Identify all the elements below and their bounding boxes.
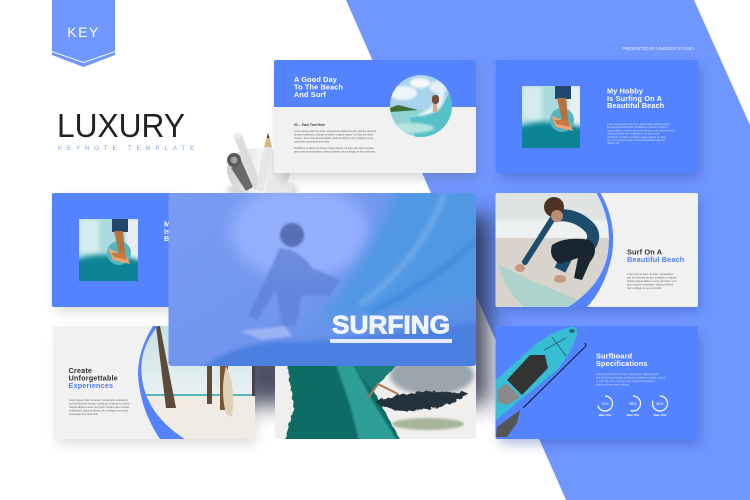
card heading: My Hobby <box>607 86 644 96</box>
surfboard illustration <box>495 327 577 421</box>
panel: my hobby card <box>496 60 700 178</box>
card body text: tempor incididunt ut labore et dolore magna aliqua. Ut enim ad minim <box>294 132 373 136</box>
icon: pencil holder <box>226 132 298 198</box>
gauge 2: 55% <box>629 402 637 406</box>
surfer feet photo <box>79 219 138 281</box>
card heading: Experiences <box>68 381 113 390</box>
panel: surfboard specifications card <box>495 326 700 444</box>
card body text: sed do eiusmod tempor incididunt ut labore et dolore <box>607 125 668 129</box>
card body text: ullamco laboris nisi ut aliquip <box>596 382 630 386</box>
card body text: laboris nisi <box>607 141 620 145</box>
card body text: dolore magna aliqua ut enim ad minim veni <box>627 279 677 283</box>
card body text: quis nostrud exercitation ullamco laboris <box>627 282 674 286</box>
surfer feet photo <box>522 86 580 148</box>
card heading: Beautiful Beach <box>627 255 684 264</box>
card body text: sed do eiusmod tempor incididunt ut labore et dolore <box>69 402 130 406</box>
panel: create unforgettable experiences card <box>53 326 256 444</box>
card body text: Incididunt ut labore et dolore magna aliqua ut enim <box>607 135 665 139</box>
card body text: sed do eiusmod tempor incididunt ut labore et dolore magna <box>596 376 666 380</box>
card body text: magna aliqua ut enim ad minim veniam quis nostrud <box>69 405 130 409</box>
card heading: Specifications <box>596 359 648 368</box>
title underline <box>330 339 452 343</box>
gauge 1: 70% <box>601 402 609 406</box>
gauge 3: 80% <box>656 402 664 406</box>
card body text <box>294 123 377 154</box>
main wave photo <box>203 193 476 366</box>
surfer photo <box>495 193 615 308</box>
panel: wave photo card <box>275 364 476 439</box>
panel: a good day card <box>274 60 478 178</box>
card body text: veniam, quis nostrud exercitation ullamco laboris nisi ut aliquip ex ea <box>294 136 373 140</box>
gauge 3 <box>652 396 668 417</box>
gauge 3: Main Title <box>654 413 667 417</box>
card body text: ullamco laboris nisi ut aliquip ex ea commodo <box>607 132 660 136</box>
presented by label: PRESENTED BY UNICODE STUDIO <box>622 46 694 52</box>
card body text: Lorem ipsum dolor sit amet, consectetur adipiscing elit, sed do eiusmod <box>294 129 377 133</box>
card body text: sed do eiusmod tempor incididunt ut labore <box>627 276 677 280</box>
gauge 1 <box>598 396 612 417</box>
card body text: exercitation ullamco laboris nisi ut aliquip commodo <box>69 408 129 412</box>
card body text: Lorem ipsum dolor sit amet, consectetur adipiscing <box>69 398 128 402</box>
card heading: Create <box>68 366 92 375</box>
paddle illustration <box>496 343 586 437</box>
card body text: consequat duis aute irure <box>69 412 99 416</box>
card body text: nisi ut aliquip ex ea commodo <box>627 286 662 290</box>
card heading fragment: B <box>164 234 169 243</box>
subtitle: KEYNOTE TEMPLATE <box>58 146 194 152</box>
card heading: To The Beach <box>294 82 343 92</box>
card heading: Unforgettable <box>68 374 118 382</box>
gauge 2: Main Title <box>627 413 640 417</box>
card body text: ut enim ad minim veniam, quis nostrud exercitation <box>596 379 655 383</box>
card body text: Incididunt ut labore et dolore magna aliqua. Ut enim ad minim veniam <box>294 146 374 150</box>
card heading: Is Surfing On A <box>607 94 663 103</box>
card body text: Lorem ipsum dolor sit amet, consectetur adipiscing elit <box>596 372 659 376</box>
panel: surf on a beach card <box>495 193 700 311</box>
main slide drop shadow <box>190 215 490 405</box>
SURFING title: SURFING <box>332 312 450 340</box>
card heading: Beautiful Beach <box>607 101 664 110</box>
card heading: Surfboard <box>596 352 632 360</box>
gauge 1: Main Title <box>599 413 612 417</box>
panel: my hobby card left copy <box>52 193 172 316</box>
card heading: A Good Day <box>294 75 338 84</box>
beach photo <box>138 326 256 441</box>
card body text: commodo consequat duis aute. <box>294 140 330 144</box>
KEY ribbon badge: KEY <box>67 24 100 40</box>
background blue diagonal shape <box>346 0 750 500</box>
card body text: ad minim veniam quis nostrud exercitation ullamco <box>607 138 666 142</box>
card body text: 02 – Your Text Here <box>294 123 325 127</box>
blue arc <box>560 193 613 307</box>
panel: main surfing slide <box>168 193 476 366</box>
card heading fragment: M <box>164 220 170 228</box>
KEY ribbon badge <box>52 0 115 67</box>
card body text: Lorem ipsum dolor sit amet, consectetur <box>627 272 673 276</box>
card body text: Lorem ipsum dolor sit amet, consectetur adipiscing elit <box>607 122 670 126</box>
card heading fragment: Is <box>164 227 170 236</box>
card body text: quis nostrud exercitation ullamco laboris nisi ut aliquip ex ea commodo <box>294 150 376 154</box>
circular surf photo <box>389 75 452 137</box>
card heading: And Surf <box>294 90 326 99</box>
card heading: Surf On A <box>627 248 663 256</box>
blue arc <box>138 326 185 439</box>
card body text: magna aliqua ut enim ad minim veniam, quis nostrud exerc <box>607 128 675 132</box>
title LUXURY: LUXURY <box>57 107 185 144</box>
gauge 2 <box>626 396 640 417</box>
